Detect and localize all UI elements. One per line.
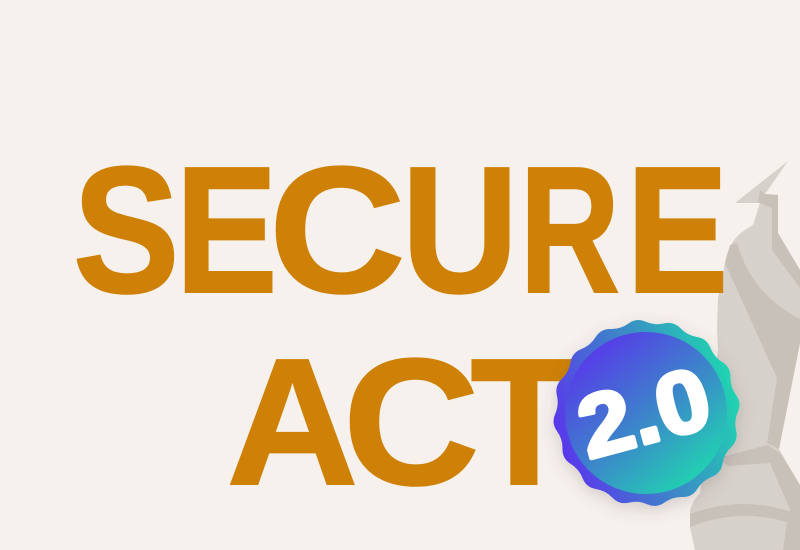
title: SECURE: U [402, 130, 518, 331]
badge inner circle [565, 332, 727, 494]
title: SECURE [73, 130, 728, 331]
statue illustration [690, 161, 800, 550]
title: SECURE: R [519, 130, 620, 331]
title: SECURE: E [175, 130, 278, 331]
badge text: 2.0 [568, 348, 721, 477]
title: SECURE: E [626, 130, 728, 331]
title: ACT [227, 322, 577, 523]
badge scalloped edge [554, 320, 739, 506]
title: SECURE: C [269, 130, 406, 331]
title: ACT: A [227, 322, 358, 523]
title: ACT: T [470, 322, 577, 523]
title: SECURE: S [73, 130, 180, 331]
title: ACT: C [343, 322, 480, 523]
badge: 2.0 [554, 320, 739, 506]
